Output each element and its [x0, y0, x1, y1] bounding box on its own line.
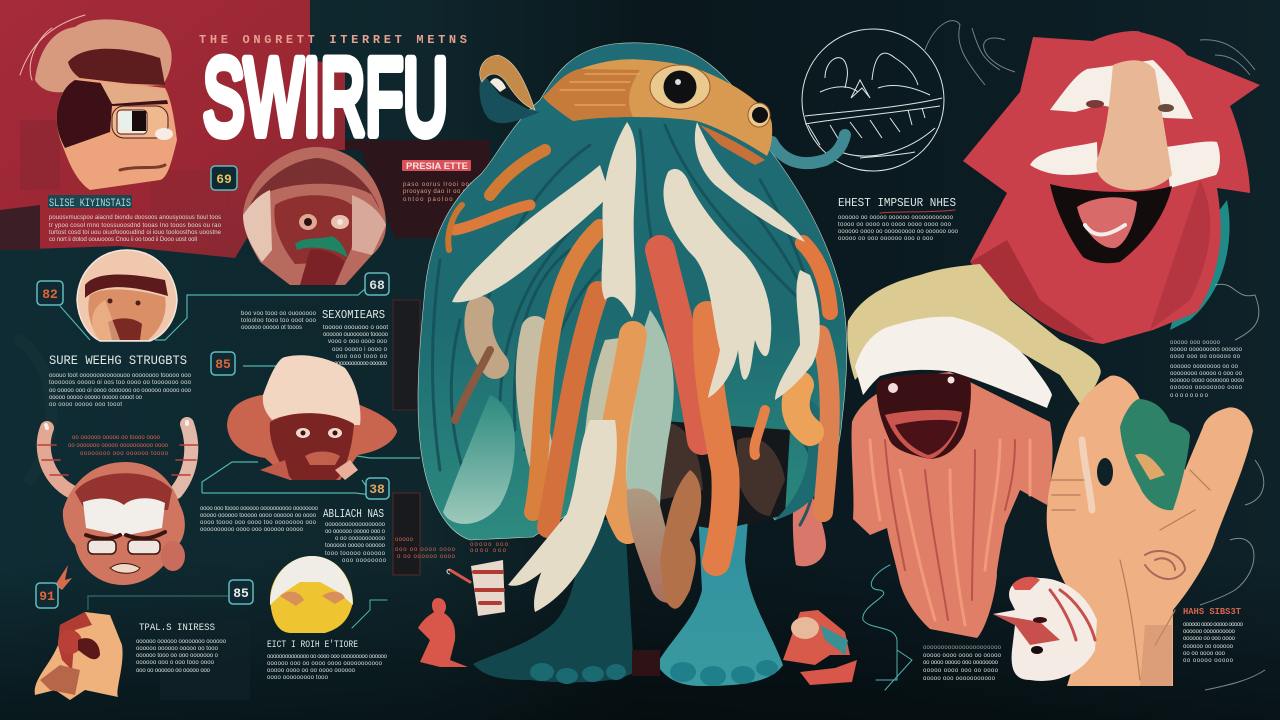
badge 69: 69	[216, 172, 232, 187]
teal light claw	[443, 395, 515, 524]
text block: right upper: oooooo oooooooo oooo	[1170, 385, 1243, 391]
small red figure	[418, 598, 468, 667]
panel: red title backdrop	[0, 0, 345, 258]
text block: abliach nas: ooo oooooooo	[342, 558, 387, 564]
big eye	[650, 65, 710, 109]
red note near pot	[470, 542, 509, 554]
central dark gap	[650, 420, 790, 530]
background technical panels	[0, 120, 420, 700]
text block: sure weehg	[49, 373, 192, 408]
text block: chest: ooooo oo ooo oooooo ooo o ooo	[838, 236, 934, 242]
left horn	[480, 55, 540, 123]
text block: right lower: oooooo oooo ooooo ooooo	[1183, 622, 1244, 628]
badge 85: 85	[215, 357, 231, 372]
text block: bottom center right: ooooo ooo ooooooooooo	[923, 676, 996, 682]
heading: eict: EICT I ROIH E'TIORE	[267, 639, 358, 651]
heading: right lower: HAHS SIBS3T	[1183, 607, 1242, 617]
badge 82	[37, 281, 63, 305]
heading: abliach nas: ABLIACH NAS	[323, 507, 384, 521]
dark brown mass	[655, 423, 785, 516]
text block: sexomiears	[323, 325, 389, 367]
text block: bottom center right: ooooo oooo ooo oo oooo	[923, 668, 999, 674]
title: SWIRFU	[203, 36, 448, 157]
text block: chest: oooooo oo ooooo oooooo oooooooooooo	[838, 215, 954, 221]
text block: right upper: ooooo ooo ooooo	[1170, 340, 1221, 346]
red note	[395, 537, 456, 560]
bottom shading	[0, 560, 1280, 720]
head 1: goggles man	[20, 15, 177, 190]
text block: abliach nas: o oo ooooooooooo	[335, 536, 386, 542]
text block: sure weehg: oo ooooo ooo oi oooo ooooooo oo oooooo ooooo ooo	[49, 388, 192, 394]
small pot	[447, 560, 505, 616]
text block: lower middle: ooooo oooooo tooooo oooo oooooo oo oooo	[200, 513, 317, 519]
text block: trail: oooooo oooooo ooooo oo tooo	[136, 646, 219, 652]
text block: right upper: ooooo ooooooooo oooooo	[1170, 347, 1243, 353]
red note: o oo oooooo oooo	[397, 554, 456, 560]
decorative swirls: right	[1200, 284, 1265, 690]
text block: tag: ontoo paoloo oo	[403, 197, 466, 203]
text block: red note over horns: oo ooooooo ooooo oooooooooo oooo	[68, 443, 169, 449]
text block: slise: tr ypoo cosol rnno toossuoosdnd tooas Ino tooos boos ou rao	[49, 223, 222, 229]
text block: trail: oooooo oooooo oooooooo oooooo	[136, 639, 227, 645]
text block: right upper: oooooo oooooooo oo oo	[1170, 364, 1239, 370]
text block: lower middle: oooo toooo ooo oooo too oooooooo ooo	[200, 520, 317, 526]
text block: sure weehg: oo oooo ooooo ooo tooot	[49, 402, 122, 408]
hat and beard figure	[847, 264, 1101, 638]
text block: sexomiears: oooooo ouoooooo tooooo	[323, 332, 389, 338]
red underline	[880, 210, 955, 213]
badge 91	[36, 583, 58, 608]
badge 85	[211, 352, 235, 375]
red face	[963, 31, 1260, 344]
badge 85b	[229, 580, 253, 604]
text block: trail: oooooo tooo oo ooo ooooooo o	[136, 653, 219, 659]
text block: slise: pouosvmucspoo aiacnd biondu doosoos anousyoosus tioul toos	[49, 215, 221, 221]
text block: right lower: oooooo oooooooooo	[1183, 629, 1236, 635]
text block: eict	[267, 654, 388, 681]
text block: bottom center right: oo oooo ooooo ooo oooooooo	[923, 660, 999, 666]
connector line: lower	[88, 596, 229, 610]
head 4: hat man	[227, 355, 397, 480]
text block: bottom center right: ooooo oooo oooo oo ooooo	[923, 653, 1002, 659]
text block: sexomiears: vooo o ooo oooo ooo	[328, 339, 388, 345]
text block: right lower: oo oo oooo ooo	[1183, 651, 1226, 657]
badge 68: 68	[369, 278, 385, 293]
small eye	[748, 103, 770, 127]
teal squiggle	[863, 565, 912, 690]
text block: upper middle: oooooo ooooo ot tooos	[241, 325, 302, 331]
badge 38	[366, 478, 389, 499]
text block: tag	[403, 182, 474, 203]
text block: sexomiears: ooo ooo tooo oo	[336, 354, 388, 360]
teal right lower	[775, 395, 832, 520]
red note near pot: ooooo ooo	[470, 542, 509, 548]
orange tentacles	[448, 150, 830, 562]
text block: sexomiears: ooo ooooo i oooo o	[332, 347, 388, 353]
connector lines: upper	[60, 283, 372, 340]
head 2: mustache mask	[243, 147, 386, 285]
text block: abliach nas: oooooooooooooooooo	[325, 522, 386, 528]
cream tentacles	[452, 122, 820, 612]
text block: right upper: oooooooo	[1170, 393, 1209, 399]
text block: lower middle: oooooooooo oooo ooo oooooo ooooo	[200, 527, 304, 533]
text block: abliach nas: toooooo ooooo oooooo	[325, 543, 386, 549]
text block: upper middle: boo voo tooo oo ouoooooo	[241, 311, 317, 317]
head 3: round portrait	[77, 250, 177, 341]
tag: PRESIA ETTE	[406, 161, 468, 171]
connector line: hat	[243, 365, 280, 367]
heading: chest: EHEST IMPSEUR NHES	[838, 196, 956, 210]
small white-bearded face	[993, 577, 1097, 681]
text block: lower middle: oooo ooo toooo oooooo oooooooooo oooooooo	[200, 506, 319, 512]
text block: red note over horns: oo oooooo ooooo oo toooo oooo	[72, 435, 161, 441]
text block: abliach nas	[325, 522, 387, 564]
text block: eict: oooo ooooooooo tooo	[267, 675, 329, 681]
pink-brown tentacle	[627, 489, 680, 603]
text block: trail: ooo oo oooooo oo ooooo ooo	[136, 668, 211, 674]
creature pink strand	[793, 470, 826, 566]
badge 85b: 85	[233, 586, 249, 601]
head 7: yellow face	[270, 556, 387, 633]
text block: trail: oooooo ooo o ooo tooo oooo	[136, 660, 215, 666]
text block: right upper	[1170, 340, 1245, 399]
text block: chest: oooooo oooo oo ooooooooo oo oooooo ooo	[838, 229, 959, 235]
badge 69	[211, 166, 237, 190]
text block: sexomiears: tooooo ooouooo o ooot	[323, 325, 388, 331]
head 6: bottom left creature	[35, 612, 123, 700]
text block: upper middle: tolooloo tooo too ooot ooo	[241, 318, 317, 324]
text block: upper middle	[241, 311, 317, 331]
text block: eict: ooooo oooo oo oo oooo oooooo	[267, 668, 356, 674]
badge 91: 91	[39, 589, 55, 604]
text block: tag: prooyaoy dao ir oo oo	[403, 189, 471, 195]
text block: sure weehg: ooooo ooooo ooooo ooooo oooot oo	[49, 395, 143, 401]
badge 38: 38	[369, 482, 385, 497]
red note near pot: oooo ooo	[470, 548, 507, 554]
text block: slise: co nort ii dotod oouuooos Cnou ii oo tood ii Dooo uost ooll	[49, 237, 197, 243]
text block: bottom center right: oooooooooooooooooooooo	[923, 645, 1002, 651]
text block: eict: oooooooooooooo oo oooo ooo ooooooooo oooooo	[267, 654, 388, 660]
creature left leg	[473, 520, 634, 684]
teal strands	[432, 125, 820, 525]
text block: red note over horns: oooooooo ooo oooooo toooo	[80, 451, 169, 457]
icon: wire sphere	[802, 29, 944, 171]
text block: bottom center right	[923, 645, 1002, 682]
beige strands	[455, 310, 545, 470]
heading: sure weehg: SURE WEEHG STRUGBTS	[49, 353, 187, 368]
mint central strand	[620, 310, 674, 510]
red note: ooooo	[395, 537, 414, 543]
right tail	[772, 135, 845, 163]
text block: chest: toooo oo oooo oo oooo oooo oooo ooo	[838, 222, 952, 228]
creature	[418, 43, 847, 686]
head mask	[543, 59, 772, 165]
text block: eict: oooooo ooo oo oooo oooo ooooooooooo	[267, 661, 383, 667]
dark red floor patch	[632, 650, 660, 676]
text block: tag: paso oorus lrooi ooo	[403, 182, 474, 188]
text block: right upper: oooooo oooo ooooooo oooo	[1170, 378, 1245, 384]
text block: abliach nas: oo oooooo ooooo ooo o	[325, 529, 386, 535]
red note: ooo oo oooo oooo	[395, 547, 456, 553]
brown tuft	[660, 470, 701, 609]
text block: sure weehg: ooouo toot oooooooooooouoo oooooooo tooooo ooo	[49, 373, 192, 379]
text block: right lower: oo ooooo ooooo	[1183, 658, 1234, 664]
text block: slise: turtost cosd toi uou oiuofooooudind oi iouo tooloosthos uoostne	[49, 230, 222, 236]
text block: right lower: oooooo oo ooo oooo	[1183, 636, 1236, 642]
hand	[1047, 376, 1253, 686]
text block: abliach nas: tooo tooooo oooooo	[325, 551, 386, 557]
creature right leg	[657, 490, 783, 686]
small figure right	[783, 610, 857, 685]
pale centre	[582, 335, 642, 500]
text block: right lower: oooooo oo oooooo	[1183, 644, 1234, 650]
heading: slise: SLISE KIYINSTAIS	[49, 198, 131, 210]
text block: red note over horns	[68, 435, 169, 457]
text block: right lower	[1183, 622, 1244, 664]
text block: lower middle	[200, 506, 319, 533]
panel: dark red pattern behind tag	[345, 140, 490, 238]
decorative swirls: top	[925, 21, 1255, 85]
subtitle: THE ONGRETT ITERRET METNS	[199, 33, 467, 47]
badge 82: 82	[42, 287, 58, 302]
heading: sexomiears: SEXOMIEARS	[322, 309, 385, 322]
text block: chest	[838, 215, 959, 242]
heading: trail: TPAL.S INIRESS	[139, 622, 215, 634]
heading: slise	[48, 195, 132, 210]
text block: trail	[136, 639, 227, 674]
badge 68	[365, 273, 389, 295]
text block: right upper: oooooooo ooooo o ooo oo	[1170, 371, 1243, 377]
body base	[418, 43, 847, 540]
text block: right upper: oooo ooo oo oooooo oo	[1170, 354, 1241, 360]
connector line: lower middle	[202, 456, 420, 495]
text block: sure weehg: toooooos ooooo oi oos too oooo oo tooooooo ooo	[49, 380, 192, 386]
text block: slise	[49, 215, 222, 243]
head 5: horned goggles	[38, 422, 198, 590]
text block: sexomiears: oooooooooooo oooooo	[334, 361, 388, 367]
